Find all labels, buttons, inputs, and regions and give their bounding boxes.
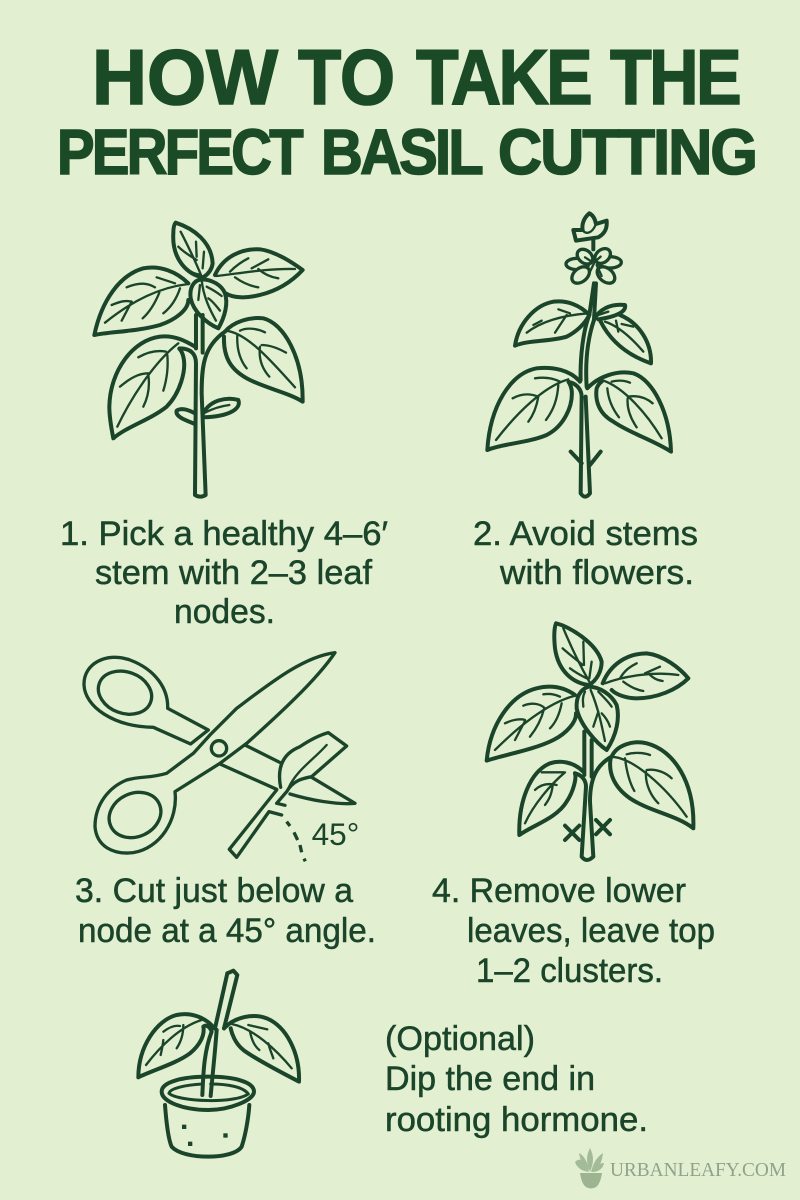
text: step 1: 1. Pick a healthy 4–6′ xyxy=(60,515,388,553)
text: step 1: nodes. xyxy=(174,593,275,631)
text: step 1: stem with 2–3 leaf xyxy=(95,554,373,592)
watermark logo: URBANLEAFY.COM xyxy=(610,1159,786,1181)
text: step 2 xyxy=(473,515,698,592)
icon: scissors cutting a stem at 45 degrees: 45° xyxy=(312,816,359,852)
title: BASIL xyxy=(321,116,483,188)
text: optional step: (Optional) xyxy=(385,1020,535,1058)
text: step 1 xyxy=(60,515,388,631)
title: TO xyxy=(298,33,395,121)
text: step 3 xyxy=(75,872,376,950)
icon: flowering basil stem xyxy=(487,213,671,497)
watermark logo xyxy=(575,1148,786,1188)
text: optional step: Dip the end in xyxy=(385,1060,595,1098)
text: step 3: 3. Cut just below a xyxy=(75,872,353,910)
text: step 2: 2. Avoid stems xyxy=(473,515,698,553)
text: step 3: node at a 45° angle. xyxy=(78,912,376,950)
title: THE xyxy=(610,33,739,121)
text: step 2: with flowers. xyxy=(499,554,694,592)
text: step 4: 1–2 clusters. xyxy=(476,952,663,990)
icon: basil stem with lower leaves removed xyxy=(487,623,693,860)
title: CUTTING xyxy=(498,116,756,188)
icon: scissors cutting a stem at 45 degrees xyxy=(84,653,359,861)
title xyxy=(57,33,756,188)
icon: healthy basil stem xyxy=(94,223,303,497)
icon: cutting in a pot xyxy=(138,971,299,1157)
text: step 4 xyxy=(432,872,715,990)
title: TAKE xyxy=(416,33,590,121)
text: step 4: 4. Remove lower xyxy=(432,872,686,910)
text: optional step: rooting hormone. xyxy=(385,1101,648,1139)
title: HOW xyxy=(92,33,278,121)
text: optional step xyxy=(385,1020,648,1139)
title: PERFECT xyxy=(57,116,304,188)
text: step 4: leaves, leave top xyxy=(467,912,715,950)
